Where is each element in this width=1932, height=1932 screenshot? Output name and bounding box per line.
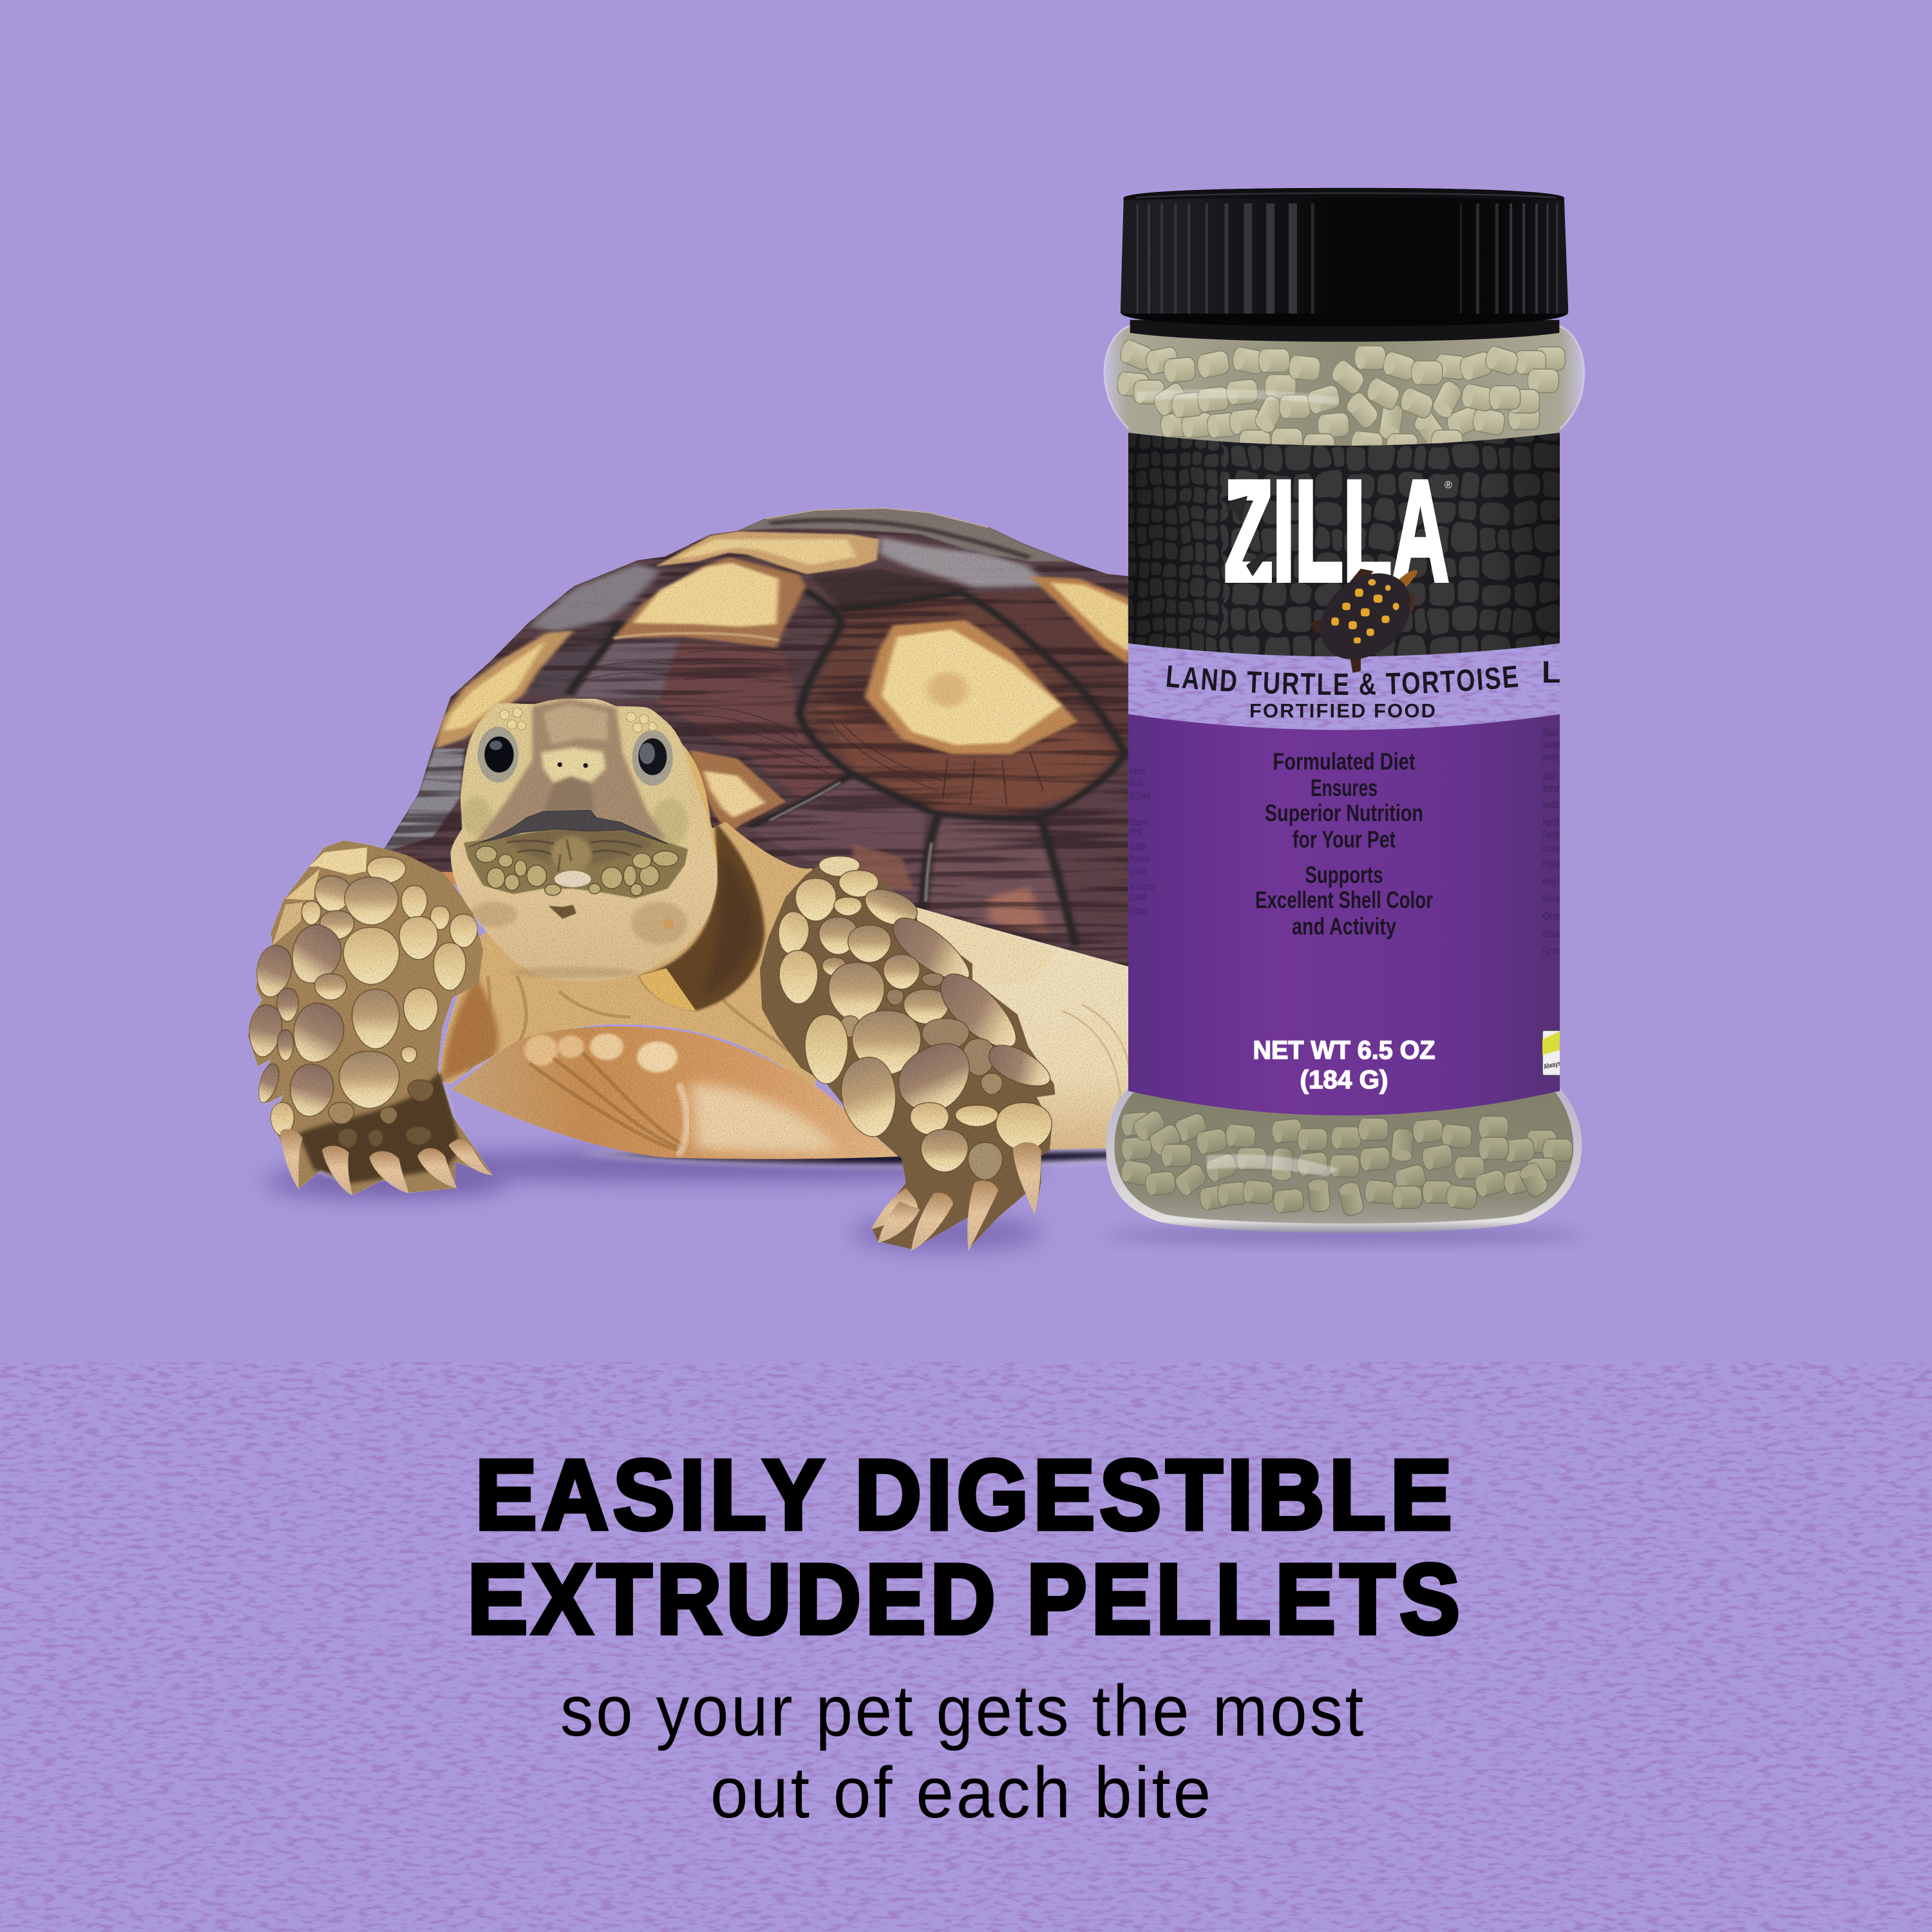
lid top rim xyxy=(1121,185,1569,200)
scute seams xyxy=(569,583,1125,946)
orange under-shell patch xyxy=(412,837,464,889)
dark streak in top band xyxy=(770,520,1030,558)
seam highlights xyxy=(770,782,931,902)
neck recess shade xyxy=(702,853,755,996)
body skin folds xyxy=(467,976,797,1074)
nostrils xyxy=(558,762,588,768)
left-side fine print: m Dried xyxy=(1130,790,1151,802)
glass rim xyxy=(1104,326,1584,429)
logo: ZILLA xyxy=(1224,451,1449,611)
pale top rim xyxy=(765,507,989,527)
left-side fine print: Alfalfa xyxy=(1130,765,1146,777)
upper shell xyxy=(384,507,1128,967)
lid bottom rim xyxy=(1117,314,1572,329)
shoulder scute xyxy=(690,750,786,834)
left-side fine print: oleal xyxy=(1130,825,1142,837)
jar shadow xyxy=(1106,1229,1582,1242)
right-side fine print: plants, dandelion xyxy=(1542,751,1588,763)
jaw bumps xyxy=(475,846,678,896)
benefits copy: Ensures xyxy=(1311,775,1378,801)
mauve field left xyxy=(574,639,679,699)
headline: EASILY DIGESTIBLE xyxy=(475,1439,1457,1550)
right foreleg xyxy=(760,856,1055,1251)
lid top highlight xyxy=(1137,193,1556,198)
background xyxy=(0,0,1932,1363)
right-side fine print xyxy=(1542,726,1593,957)
left-side fine print: Meal xyxy=(1130,776,1142,788)
dark top of central field xyxy=(811,569,969,607)
logo xyxy=(1224,451,1452,611)
product jar xyxy=(1104,188,1586,1249)
ring arcs xyxy=(578,650,1043,806)
small turtle mark xyxy=(1307,556,1424,677)
net weight xyxy=(1253,1036,1435,1094)
lower centre field xyxy=(929,820,1075,946)
tan notch xyxy=(852,844,913,889)
left-side fine print: in Source xyxy=(1130,880,1155,893)
left-side fine print: Vitamin xyxy=(1130,816,1150,828)
left eye xyxy=(478,726,518,782)
chin mark xyxy=(549,905,576,919)
skin fold shade xyxy=(443,976,498,1081)
olive face tones xyxy=(462,797,688,846)
net weight: (184 G) xyxy=(1300,1066,1388,1094)
top glass with pellets xyxy=(1104,326,1584,462)
left-side fine print: Sulfite xyxy=(1130,840,1146,853)
snout xyxy=(475,699,667,844)
right eye xyxy=(632,730,673,786)
hind foot xyxy=(451,1027,898,1159)
headline xyxy=(468,1439,1464,1654)
tortoise photo illustration xyxy=(245,502,1140,1251)
subheading: so your pet gets the most xyxy=(560,1671,1366,1751)
right-side fine print: Zilla® Land xyxy=(1542,770,1573,782)
top scute xyxy=(656,531,879,574)
product subtitle: FORTIFIED FOOD xyxy=(1249,699,1435,722)
benefits copy: Superior Nutrition xyxy=(1265,800,1423,826)
yellow neck flap xyxy=(639,968,696,1011)
right-side fine print: health, as xyxy=(1542,799,1569,811)
lower-left grey rim xyxy=(382,749,464,852)
mouth interior xyxy=(504,829,655,871)
brown field under second scute xyxy=(656,640,848,803)
left leg scales xyxy=(245,848,478,1148)
lid xyxy=(1117,185,1572,342)
lower right field xyxy=(1052,768,1130,968)
bottom glass with pellets xyxy=(1106,1087,1582,1233)
registered mark: ® xyxy=(1444,480,1452,491)
left foreleg xyxy=(245,840,493,1195)
right shell field xyxy=(971,591,1130,759)
right-side fine print: nutritionally xyxy=(1542,739,1573,751)
benefits copy: Excellent Shell Color xyxy=(1255,887,1433,913)
beak bridge xyxy=(543,777,594,811)
product name: LAND TURTLE & TORTOISE xyxy=(1167,665,1519,696)
brow scales xyxy=(500,708,657,732)
dark neck recess xyxy=(639,822,764,1011)
grey marginal top band xyxy=(738,507,1070,562)
headline: EXTRUDED PELLETS xyxy=(468,1544,1464,1654)
right-side fine print: •Do not xyxy=(1542,910,1562,922)
growth-ring streaks xyxy=(374,502,1140,1005)
lower shell growth rings xyxy=(1063,1005,1130,1108)
cheek shading xyxy=(470,902,687,978)
right-side fine print: For maximum xyxy=(1542,945,1579,957)
lower shoulder field xyxy=(747,779,925,909)
orange skin spot xyxy=(663,919,674,929)
benefits copy: Supports xyxy=(1305,862,1383,888)
right-side fine print: Feeding Directions xyxy=(1542,816,1593,828)
left scute xyxy=(435,630,574,749)
lavender textured band xyxy=(1128,638,1560,747)
cream lower shell xyxy=(902,902,1133,1150)
right-side fine print: Designed xyxy=(1542,828,1567,840)
right-side fine print: •May be xyxy=(1542,875,1564,887)
bottom glass highlight xyxy=(1207,1154,1338,1177)
textured lower band xyxy=(0,1362,1932,1932)
benefits copy: Formulated Diet xyxy=(1273,748,1416,775)
black scale print xyxy=(1114,425,1575,670)
product name xyxy=(1146,634,1545,730)
side neck flap xyxy=(683,745,717,904)
field around big scute xyxy=(802,594,1125,817)
net weight: NET WT 6.5 OZ xyxy=(1253,1036,1435,1065)
benefits copy: and Activity xyxy=(1292,913,1396,940)
nose patch xyxy=(541,748,606,784)
warning sticker: Always wash xyxy=(1543,1057,1575,1071)
body skin xyxy=(440,822,898,1159)
top pellets xyxy=(1117,338,1565,457)
dark toes area xyxy=(298,1072,462,1184)
right foot claws xyxy=(871,1142,1041,1251)
tortoise ground shadow xyxy=(264,1151,1050,1250)
subheading: out of each bite xyxy=(710,1752,1213,1833)
benefits copy xyxy=(1255,748,1433,940)
second scute xyxy=(614,557,806,648)
chin tip xyxy=(554,871,591,887)
benefits copy: for Your Pet xyxy=(1293,826,1396,853)
lower jaw xyxy=(464,829,688,898)
logo gator notches xyxy=(1224,496,1268,576)
left-side fine print: Cobalt xyxy=(1130,891,1147,903)
field lower big scute warm xyxy=(820,699,1116,813)
upper face xyxy=(462,699,690,849)
right-side fine print: that provides xyxy=(1542,782,1577,795)
left-side fine print: thyroxin xyxy=(1130,853,1151,865)
wrap-around product name: LAND xyxy=(1542,656,1627,690)
left-side fine print xyxy=(1130,765,1155,917)
left foot claws xyxy=(280,1129,493,1195)
right-side fine print: Provide clean xyxy=(1542,858,1579,870)
right-side fine print: occasional xyxy=(1542,842,1571,854)
turtle spots xyxy=(1331,579,1399,643)
right-side fine print: •Mix with xyxy=(1542,893,1566,905)
right scute xyxy=(1030,576,1130,665)
neck and chin xyxy=(451,699,717,981)
left grey marginal xyxy=(528,564,660,632)
bottom pellets xyxy=(1120,1108,1573,1217)
shell colour regions xyxy=(382,569,1130,968)
lid ribs xyxy=(1137,204,1558,322)
upper beak dark xyxy=(469,810,668,847)
jaw centre xyxy=(551,836,591,873)
glass highlight xyxy=(1137,390,1338,405)
subheading xyxy=(560,1671,1366,1833)
right-side fine print: Zilla® Land Turtle xyxy=(1542,726,1590,739)
warning sticker xyxy=(1542,1030,1575,1075)
under-body contact shadow xyxy=(580,1150,1127,1166)
head xyxy=(451,699,717,981)
left-side fine print: Extract xyxy=(1130,905,1148,917)
jaw dark wrinkles xyxy=(507,839,642,871)
dark side field xyxy=(524,618,620,696)
left-side fine print: Lysine xyxy=(1130,865,1147,877)
tan lower patch xyxy=(989,887,1050,936)
large scute xyxy=(864,620,1077,754)
shell lip xyxy=(914,907,1056,985)
grey patch xyxy=(879,537,1048,587)
purple panel xyxy=(1128,708,1560,1146)
label xyxy=(1128,433,1560,1115)
right leg scales xyxy=(773,856,1054,1180)
forehead light xyxy=(543,704,607,745)
right-side fine print: •Discard xyxy=(1542,927,1565,940)
